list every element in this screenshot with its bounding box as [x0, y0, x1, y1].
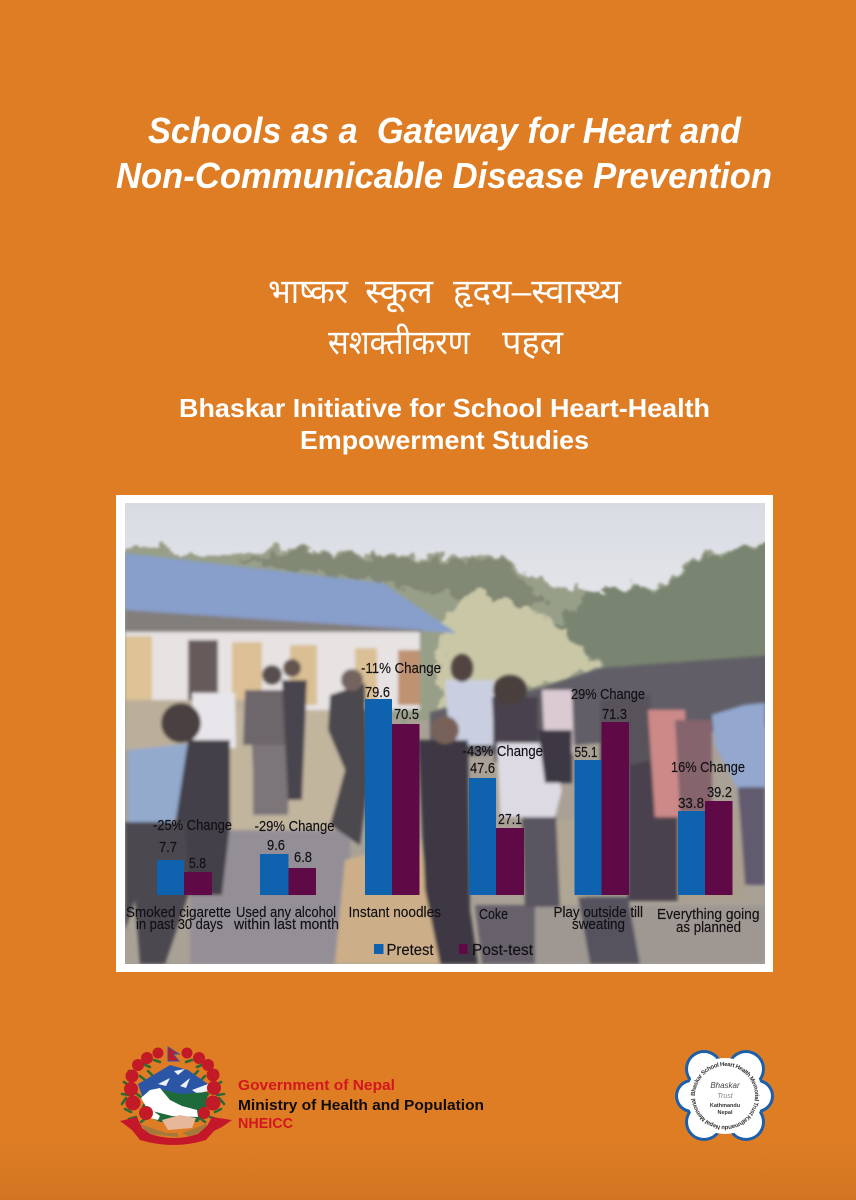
rhododendron wreath — [124, 1048, 221, 1120]
group: play outside — [554, 686, 645, 933]
group: everything going as planned: as planned — [676, 919, 741, 936]
group: instant noodles: -11% Change — [361, 660, 441, 677]
flag — [168, 1047, 179, 1061]
group: everything going as planned — [657, 759, 760, 936]
group: play outside: 55.1 — [574, 744, 598, 761]
footer: ministry text: Government of Nepal — [238, 1078, 395, 1094]
footer: ministry text: Ministry of Health and Population — [238, 1098, 484, 1114]
group: play outside: Play outside till — [554, 904, 643, 921]
group: instant noodles: 70.5 — [394, 706, 419, 723]
people — [628, 753, 678, 901]
nepali heading — [268, 273, 622, 362]
group: alcohol: -29% Change — [254, 818, 334, 835]
group: play outside: 71.3 — [602, 706, 627, 723]
group: alcohol: 6.8 — [294, 849, 312, 866]
group: smoked cigarette: 7.7 — [159, 839, 177, 856]
group: alcohol — [233, 818, 339, 933]
ribbon — [120, 1117, 232, 1145]
panel: photo with bar chart — [115, 495, 775, 972]
group: everything going as planned: 16% Change — [671, 759, 745, 776]
group: coke: 47.6 — [470, 760, 495, 777]
group: instant noodles: Instant noodles — [348, 904, 441, 921]
group: alcohol: 9.6 — [267, 837, 285, 854]
group: coke: Coke — [479, 906, 508, 923]
subtitle — [179, 393, 710, 455]
mountains — [138, 1065, 208, 1096]
group: smoked cigarette: in past 30 days — [136, 916, 223, 933]
group: coke: 27.1 — [498, 811, 522, 828]
title: Non-Communicable Disease Prevention — [116, 155, 772, 196]
roof — [125, 553, 456, 633]
footer: ministry text — [238, 1078, 484, 1132]
group: play outside: 29% Change — [571, 686, 645, 703]
nepali heading: हृदय–स्वास्थ्य — [453, 273, 622, 311]
group: instant noodles: 79.6 — [365, 684, 390, 701]
group: smoked cigarette — [126, 817, 232, 933]
group: alcohol: within last month — [233, 916, 339, 933]
group: instant noodles — [348, 660, 441, 921]
group: everything going as planned: 39.2 — [707, 784, 732, 801]
group: everything going as planned: Everything going — [657, 906, 760, 923]
title: Schools as a Gateway for Heart and — [148, 110, 742, 151]
nepali heading: स्कूल — [365, 273, 434, 313]
group: smoked cigarette: 5.8 — [189, 855, 206, 872]
group: coke: -43% Change — [462, 743, 543, 760]
subtitle: Bhaskar Initiative for School Heart-Health — [179, 393, 710, 423]
school photo background — [115, 503, 775, 964]
ground tones — [125, 700, 255, 750]
icon: flower logo: Nepal — [718, 1110, 733, 1116]
legend: Post-test — [472, 942, 534, 959]
icon: flower logo: Trust — [717, 1093, 734, 1100]
group: everything going as planned: 33.8 — [678, 795, 704, 812]
legend — [374, 942, 534, 959]
icon: flower logo: Bhaskar — [710, 1081, 740, 1090]
nepali heading: पहल — [502, 324, 564, 362]
icon: nepal government emblem — [120, 1047, 232, 1145]
group: play outside: sweating — [572, 916, 625, 933]
legend: Pretest — [386, 942, 434, 959]
nepali heading: भाष्कर — [268, 273, 349, 311]
group: alcohol: Used any alcohol — [236, 904, 336, 921]
icon: flower logo: Kathmandu — [710, 1103, 740, 1109]
title — [116, 110, 772, 196]
dark fence — [430, 655, 775, 760]
bar chart — [126, 660, 760, 959]
icon: flower logo — [675, 1050, 774, 1141]
footer: ministry text: NHEICC — [238, 1116, 294, 1132]
group: smoked cigarette: Smoked cigarette — [126, 904, 231, 921]
leaves — [122, 1060, 224, 1122]
nepali heading: सशक्तीकरण — [328, 323, 471, 362]
icon: flower logo: Bhaskar School Heart Health Memorial Trust Kathmandu Nepal Memorial — [690, 1062, 760, 1130]
group: smoked cigarette: -25% Change — [153, 817, 232, 834]
subtitle: Empowerment Studies — [300, 425, 589, 455]
group: coke — [462, 743, 543, 923]
